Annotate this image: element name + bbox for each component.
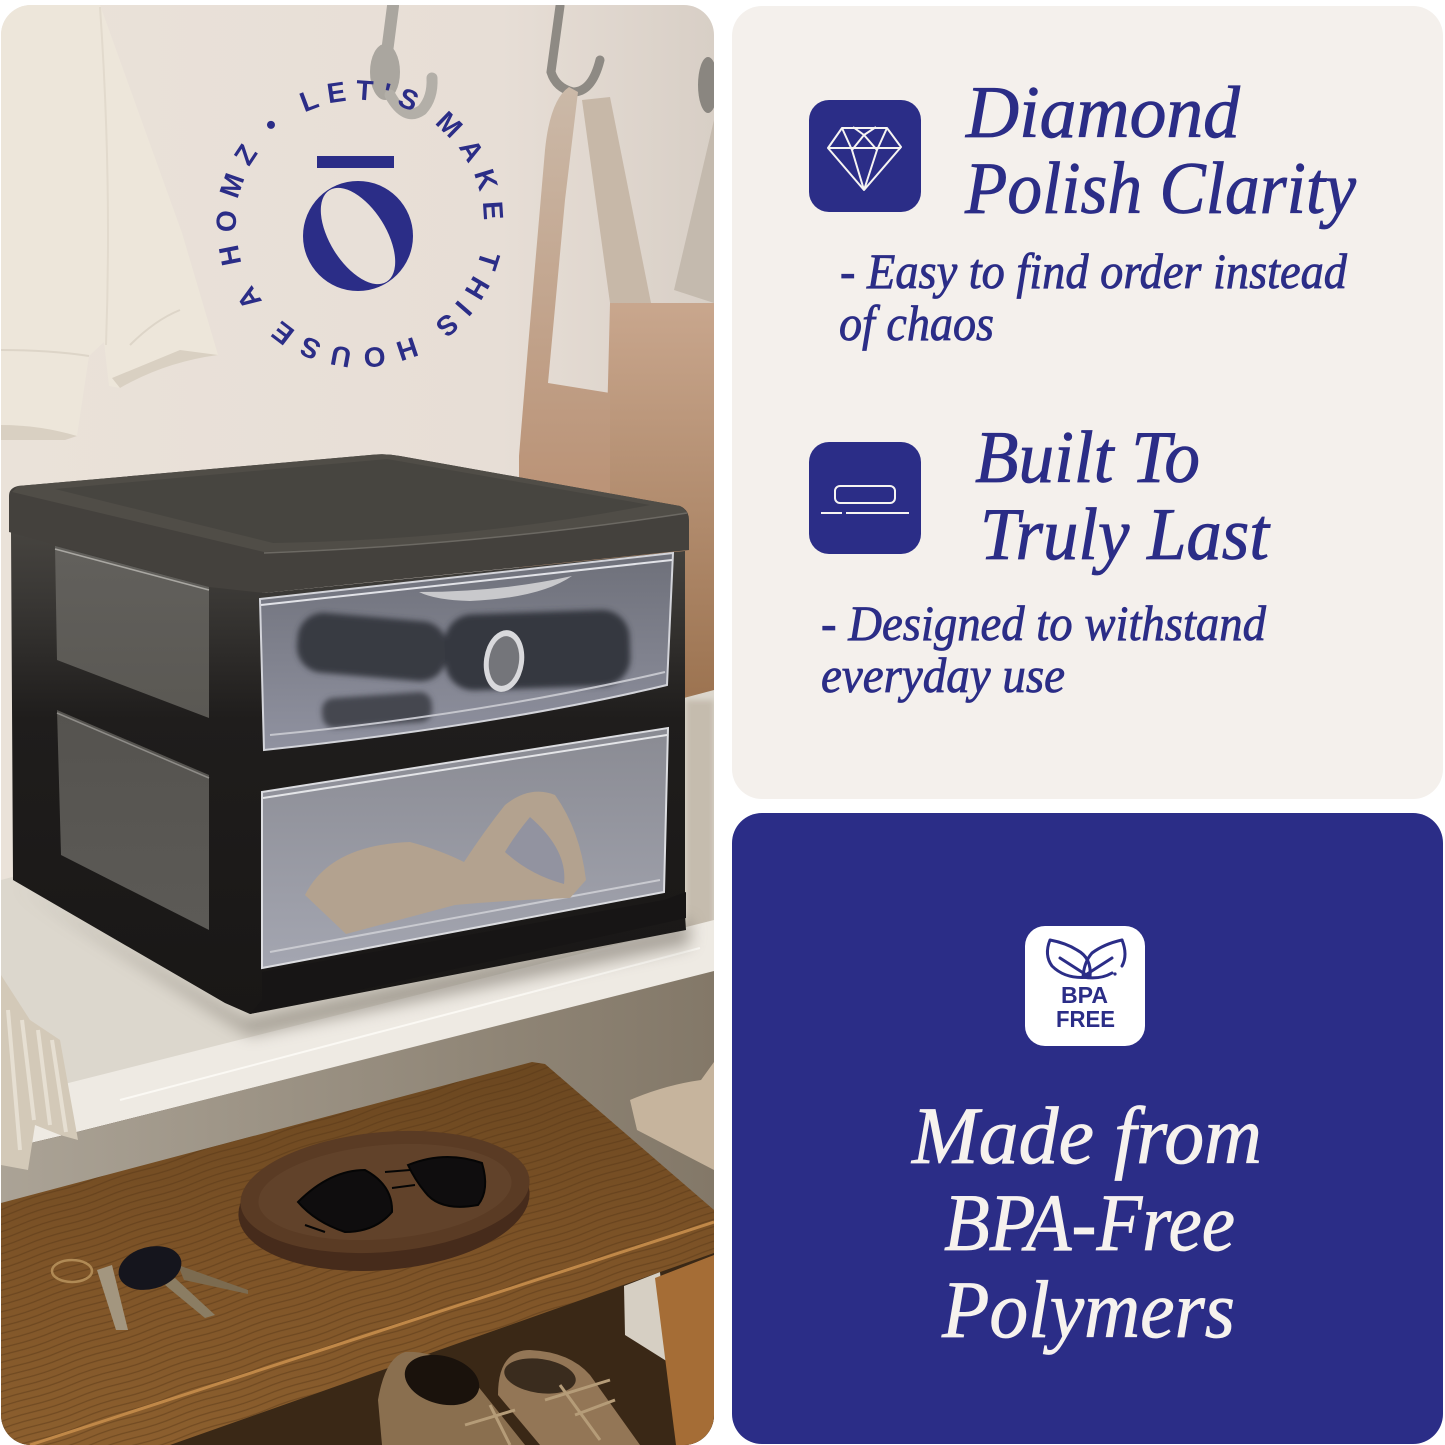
heading: made from bpa-free polymers: Made from <box>911 1090 1262 1181</box>
under bench darkness <box>581 1253 714 1445</box>
sunglasses <box>298 1157 485 1232</box>
bottom drawer <box>262 728 668 968</box>
icon: bpa free badge <box>1025 926 1145 1046</box>
cabinet shadow <box>73 916 699 1042</box>
circular slogan: LET'S MAKE THIS HOUSE A HOMZ • <box>216 80 504 368</box>
text: designed to withstand <box>821 595 1267 703</box>
icon: bpa free badge: BPA <box>1061 982 1108 1008</box>
icon: bpa free badge: FREE <box>1056 1006 1115 1032</box>
left window bottom <box>57 710 209 930</box>
text: easy to find order: - Easy to find order instead <box>840 243 1348 299</box>
text: easy to find order: of chaos <box>839 295 994 351</box>
hanging shirt <box>1 5 218 440</box>
heading: made from bpa-free polymers <box>911 1090 1262 1355</box>
bench leg <box>655 1255 714 1445</box>
top drawer rim <box>261 560 672 605</box>
logo bar <box>317 156 394 168</box>
panel: product photo <box>1 5 714 1445</box>
drawer handle <box>419 576 572 601</box>
bag in drawer <box>305 792 586 934</box>
heading: diamond polish clarity: Polish Clarity <box>964 148 1356 230</box>
wall under shelf <box>1 971 714 1210</box>
keys <box>52 1239 248 1330</box>
icon: built to last tile <box>809 442 921 554</box>
frame body <box>11 532 686 1014</box>
text: designed to withstand: everyday use <box>821 647 1065 703</box>
storage drawer unit <box>9 454 690 1035</box>
flashlight lens <box>484 630 524 692</box>
tote bag with straps <box>519 87 714 700</box>
lid <box>9 454 689 593</box>
round logo badge <box>216 80 504 368</box>
heading: made from bpa-free polymers: BPA-Free <box>944 1177 1235 1268</box>
basket on bench <box>630 1062 714 1170</box>
items in top drawer <box>295 609 631 729</box>
panel: bpa free <box>732 813 1443 1444</box>
frame lower edge <box>250 892 686 1014</box>
heading: diamond polish clarity: Diamond <box>965 72 1241 154</box>
wooden tray <box>238 1131 530 1271</box>
heading: built to truly last <box>975 417 1271 576</box>
back wall under bench <box>624 1272 668 1362</box>
logo ring <box>303 181 413 291</box>
icon: diamond tile <box>809 100 921 212</box>
heading: built to truly last: Built To <box>975 417 1200 499</box>
top drawer <box>260 553 673 750</box>
wall background <box>1 5 714 880</box>
shoes <box>378 1347 640 1445</box>
wooden bench <box>1 1062 714 1445</box>
heading: made from bpa-free polymers: Polymers <box>941 1264 1235 1355</box>
blanket fringe <box>1 975 78 1170</box>
heading: built to truly last: Truly Last <box>980 494 1271 576</box>
heading: diamond polish clarity <box>964 72 1356 230</box>
panel: features <box>732 6 1443 799</box>
white shelf <box>1 690 714 1150</box>
left window top <box>55 546 209 718</box>
text: designed to withstand: - Designed to withstand <box>821 595 1267 651</box>
wall hooks <box>370 6 718 114</box>
text: easy to find order <box>839 243 1348 351</box>
